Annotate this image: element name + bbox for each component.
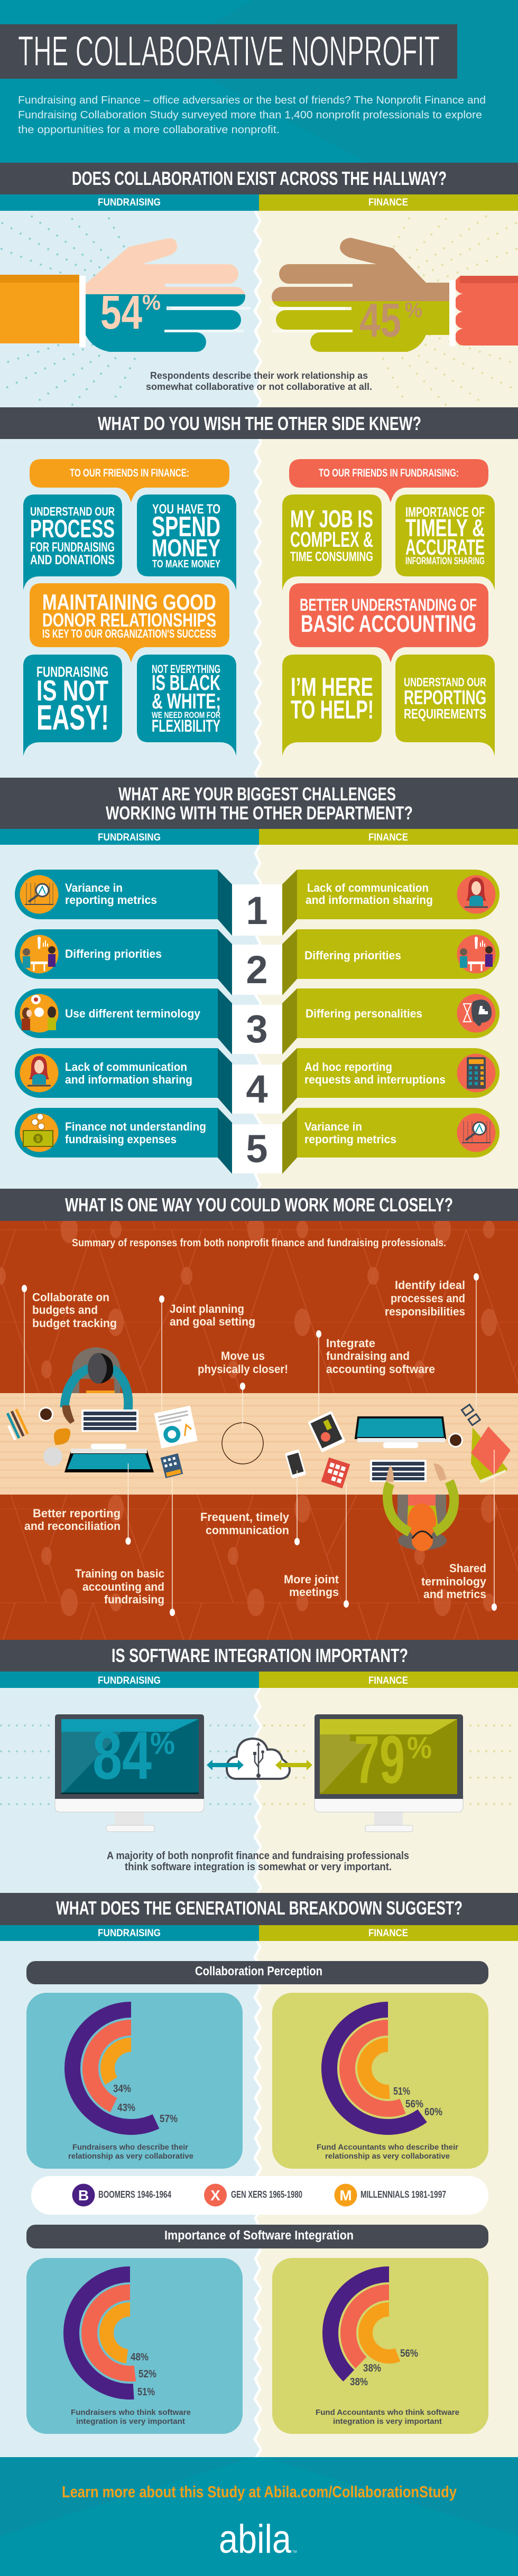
number column: 4 <box>246 1067 268 1111</box>
pill: importance of software integration: Importance of Software Integration <box>164 2228 354 2243</box>
bubble: reporting requirements: UNDERSTAND OUR <box>404 675 486 689</box>
icon: left monitor with 84 percent <box>55 1714 204 1832</box>
number column: 3 <box>246 1007 268 1051</box>
legend: GEN XERS 1965-1980 <box>231 2189 302 2200</box>
label: identify processes: Identify ideal <box>395 1278 465 1292</box>
bubble: donor relationships: DONOR RELATIONSHIPS <box>42 609 216 631</box>
chart: fundraisers collaboration: Fundraisers who describe their <box>72 2143 188 2152</box>
bubble: reporting requirements: REQUIREMENTS <box>404 706 486 722</box>
ribbon row 3: Differing personalities <box>306 1007 422 1020</box>
ribbon row 5: Finance not understanding <box>65 1120 206 1133</box>
number column <box>232 884 282 1173</box>
ribbon row 4: Lack of communication <box>65 1060 187 1074</box>
caption: respondents: somewhat collaborative or not collaborative at all. <box>146 381 372 392</box>
label: training: accounting and <box>82 1580 164 1593</box>
chart: accountants collaboration: 51% <box>393 2086 410 2097</box>
label: joint planning: Joint planning <box>170 1302 244 1315</box>
department strip 3 <box>0 1672 518 1688</box>
bubble: spend money <box>137 494 236 590</box>
heading: software integration: IS SOFTWARE INTEGRATION IMPORTANT? <box>112 1645 408 1666</box>
department strip 2 <box>0 829 518 845</box>
label: better reporting <box>24 1507 121 1533</box>
ribbon row 5: Variance in <box>304 1120 362 1133</box>
bubble: black and white: FLEXIBILITY <box>152 716 220 735</box>
panel: software integration <box>0 1688 518 1893</box>
bubble: fundraising is not easy: IS NOT <box>36 674 108 707</box>
ribbon row 2: Differing priorities <box>65 947 162 960</box>
bubble: donor relationships: MAINTAINING GOOD <box>42 590 216 614</box>
chart: accountants software: integration is very important <box>333 2417 442 2426</box>
icon: center plate <box>222 1423 263 1464</box>
stat: 54 percent: 54 <box>100 286 142 339</box>
bubble: my job is complex: TIME CONSUMING <box>290 549 373 564</box>
ribbon row 5: fundraising expenses <box>65 1133 177 1146</box>
icon: right monitor with 79 percent: 79 <box>354 1722 405 1798</box>
ribbon row 4: Ad hoc reporting <box>304 1060 392 1074</box>
label: collaborate on budgets: Collaborate on <box>32 1291 109 1304</box>
chart: accountants software: Fund Accountants who think software <box>316 2408 459 2417</box>
bubble: here to help: TO HELP! <box>291 696 374 724</box>
chart: accountants software: 38% <box>350 2376 368 2388</box>
pill: collaboration perception <box>26 1961 488 1984</box>
chart: accountants collaboration: relationship as very collaborative <box>325 2152 450 2161</box>
label: better reporting: and reconciliation <box>24 1519 121 1533</box>
chart: fundraisers software: 48% <box>131 2351 149 2363</box>
person: bottom right <box>386 1463 454 1551</box>
bubble: timely and accurate: IMPORTANCE OF <box>405 504 485 520</box>
chart: fundraisers software: integration is very important <box>76 2417 185 2426</box>
heading: what do you wish: WHAT DO YOU WISH THE OTHER SIDE KNEW? <box>98 413 421 434</box>
bubble: spend money: YOU HAVE TO <box>152 502 220 517</box>
ribbon row 4 <box>15 1048 500 1114</box>
legend: B <box>78 2187 89 2204</box>
heading: what do you wish <box>0 407 518 439</box>
stat: 54 percent: % <box>142 291 161 314</box>
panel: generational charts <box>0 1941 518 2457</box>
bubble: to friends in finance: TO OUR FRIENDS IN FINANCE: <box>70 467 189 479</box>
label: frequent communication: communication <box>206 1524 289 1537</box>
icon: right monitor with 79 percent <box>314 1714 463 1832</box>
department strip 2: FINANCE <box>368 832 408 843</box>
person: top left <box>62 1347 130 1429</box>
bubble: understand process: AND DONATIONS <box>30 553 115 567</box>
bubble: spend money: MONEY <box>152 534 220 562</box>
label: identify processes: responsibilities <box>385 1305 465 1318</box>
bubble: spend money: SPEND <box>152 511 220 543</box>
icon: usb cloud <box>227 1739 290 1779</box>
label: integrate software: Integrate <box>326 1337 375 1350</box>
heading: biggest challenges: WORKING WITH THE OTHER DEPARTMENT? <box>106 803 413 824</box>
label: more joint meetings: More joint <box>284 1573 339 1586</box>
ribbon row 1: Variance in <box>65 881 123 894</box>
label: shared terminology: and metrics <box>423 1588 486 1601</box>
intro text: Fundraising and Finance – office adversaries or the best of friends? The Nonprofit Finance and <box>18 95 486 106</box>
icon: left monitor with 84 percent: 84 <box>92 1718 152 1794</box>
caption: majority: A majority of both nonprofit finance and fundraising professionals <box>107 1850 409 1862</box>
chart: fundraisers software: 52% <box>138 2368 156 2380</box>
department strip 3: FINANCE <box>368 1675 408 1686</box>
chart: accountants collaboration: 56% <box>405 2098 423 2110</box>
stat: 45 percent: 45 <box>359 294 401 347</box>
label: better reporting: Better reporting <box>33 1507 121 1520</box>
number column: 5 <box>246 1127 268 1171</box>
label: more joint meetings: meetings <box>289 1585 339 1599</box>
subtitle: Summary of responses from both nonprofit finance and fundraising professionals. <box>72 1237 446 1249</box>
number column: 2 <box>246 948 268 992</box>
department strip 2: FUNDRAISING <box>98 832 161 843</box>
department strip 4: FUNDRAISING <box>98 1928 161 1939</box>
label: move us closer: Move us <box>221 1349 265 1362</box>
icon: desk items left <box>3 1406 198 1478</box>
department strip 3: FUNDRAISING <box>98 1675 161 1686</box>
bubble: donor relationships <box>30 583 229 662</box>
chart: fundraisers collaboration: 57% <box>160 2113 178 2125</box>
bubble: donor relationships: IS KEY TO OUR ORGANIZATION'S SUCCESS <box>42 627 216 640</box>
panel: footer <box>0 2457 518 2576</box>
bubble: reporting requirements <box>395 655 495 756</box>
bubble: to friends in fundraising <box>289 459 488 502</box>
ribbon row 1: Lack of communication <box>307 881 429 894</box>
bubble: black and white <box>137 655 236 756</box>
chart: fundraisers collaboration: relationship as very collaborative <box>68 2152 193 2161</box>
bubble: here to help: I’M HERE <box>291 673 373 702</box>
bubble: to friends in fundraising: TO OUR FRIENDS IN FUNDRAISING: <box>319 467 459 479</box>
legend: MILLENNIALS 1981-1997 <box>360 2189 446 2200</box>
caption: respondents: Respondents describe their work relationship as <box>150 370 368 381</box>
heading: software integration <box>0 1640 518 1672</box>
bubble: understand process: UNDERSTAND OUR <box>30 505 115 518</box>
label: move us closer <box>198 1349 288 1376</box>
heading: generational breakdown <box>0 1893 518 1925</box>
label: collaborate on budgets <box>32 1291 117 1330</box>
legend: X <box>210 2187 220 2204</box>
bubble: fundraising is not easy <box>23 655 122 756</box>
label: training: Training on basic <box>75 1567 164 1580</box>
label: move us closer: physically closer! <box>198 1362 288 1376</box>
department strip 1: FUNDRAISING <box>98 197 161 208</box>
pointer lines <box>22 1273 497 1616</box>
bubble: spend money: TO MAKE MONEY <box>152 558 220 570</box>
label: training: fundraising <box>104 1593 164 1606</box>
bubble: timely and accurate: TIMELY & <box>405 514 485 542</box>
label: identify processes: processes and <box>391 1292 465 1305</box>
icon: right monitor with 79 percent: % <box>407 1731 432 1765</box>
label: shared terminology: Shared <box>449 1562 486 1575</box>
bubble: my job is complex <box>282 494 382 590</box>
bubble: black and white: NOT EVERYTHING <box>152 662 220 676</box>
bubble: to friends in finance <box>30 459 229 502</box>
legend: BOOMERS 1946-1964 <box>98 2189 171 2200</box>
label: frequent communication <box>200 1510 290 1537</box>
chart: accountants collaboration: Fund Accountants who describe their <box>317 2143 458 2152</box>
chart: fundraisers software: 51% <box>137 2386 155 2398</box>
icon: right hand <box>270 238 518 352</box>
bubble: my job is complex: MY JOB IS <box>290 505 373 533</box>
bubble: fundraising is not easy: FUNDRAISING <box>36 664 108 680</box>
chart: fundraisers collaboration: 43% <box>117 2102 135 2114</box>
icon: left monitor with 84 percent: % <box>150 1726 175 1761</box>
label: integrate software: fundraising and <box>326 1349 410 1362</box>
label: joint planning: and goal setting <box>170 1315 255 1328</box>
label: frequent communication: Frequent, timely <box>200 1510 290 1524</box>
bubble: here to help <box>282 655 382 756</box>
intro text: Fundraising Collaboration Study surveyed more than 1,400 nonprofit professionals to explore <box>18 109 482 121</box>
chart: fundraisers collaboration <box>26 1993 243 2169</box>
panel: wish bubbles <box>0 439 518 778</box>
label: shared terminology: terminology <box>421 1575 487 1588</box>
bubble: understand process: FOR FUNDRAISING <box>30 540 115 555</box>
label: integrate software <box>326 1337 435 1376</box>
ribbon row 4: and information sharing <box>65 1073 192 1086</box>
panel: intro header <box>0 0 518 164</box>
label: identify processes <box>385 1278 465 1318</box>
label: joint planning <box>170 1302 255 1328</box>
desk surface <box>0 1393 518 1495</box>
ribbon row 5: reporting metrics <box>304 1133 396 1146</box>
legend: M <box>339 2187 352 2204</box>
chart: accountants collaboration <box>272 1993 488 2169</box>
ribbon row 1 <box>15 870 500 936</box>
intro text <box>18 95 486 136</box>
label: collaborate on budgets: budget tracking <box>32 1317 117 1330</box>
panel: desk scene <box>0 1221 518 1640</box>
bubble: basic accounting <box>289 583 488 662</box>
ribbon row 2: Differing priorities <box>304 949 401 962</box>
heading: work more closely <box>0 1189 518 1221</box>
label: training <box>75 1567 164 1606</box>
stat: 45 percent: % <box>405 298 422 322</box>
label: shared terminology <box>421 1562 487 1601</box>
label: more joint meetings <box>284 1573 339 1599</box>
logo: abila: abila <box>219 2517 292 2562</box>
department strip 1 <box>0 194 518 211</box>
bubble: understand process: PROCESS <box>30 515 115 543</box>
legend <box>31 2176 488 2215</box>
bubble: black and white: WE NEED ROOM FOR <box>152 710 220 720</box>
panel: challenges ranking <box>0 845 518 1189</box>
logo: abila: TM <box>292 2551 297 2554</box>
label: integrate software: accounting software <box>326 1362 435 1376</box>
chart: fundraisers software: Fundraisers who think software <box>71 2408 191 2417</box>
chart: fundraisers software <box>26 2258 243 2434</box>
caption: majority: think software integration is somewhat or very important. <box>125 1861 392 1873</box>
arrow: fundraising to cloud <box>207 1760 244 1770</box>
icon: left hand <box>0 238 251 352</box>
ribbon row 4: requests and interruptions <box>304 1073 446 1086</box>
department strip 4 <box>0 1925 518 1941</box>
arrow: finance to cloud <box>275 1760 312 1770</box>
bubble: black and white: IS BLACK <box>152 670 220 695</box>
heading: biggest challenges: WHAT ARE YOUR BIGGEST CHALLENGES <box>118 784 396 805</box>
pill: importance of software integration <box>26 2225 488 2248</box>
ribbon row 1: and information sharing <box>306 893 433 907</box>
bubble: fundraising is not easy: EASY! <box>36 698 109 738</box>
ribbon row 3 <box>15 988 500 1054</box>
caption: majority <box>107 1850 409 1873</box>
department strip 4: FINANCE <box>368 1928 408 1939</box>
ribbon row 2 <box>15 929 500 995</box>
chart: accountants software: 38% <box>363 2363 381 2374</box>
ribbon row 1: reporting metrics <box>65 893 157 907</box>
ribbon row 5 <box>15 1108 500 1174</box>
chart: accountants software <box>272 2258 488 2434</box>
intro text: the opportunities for a more collaborative nonprofit. <box>18 124 280 136</box>
chart: accountants software: 56% <box>400 2348 418 2359</box>
pill: collaboration perception: Collaboration Perception <box>195 1964 322 1978</box>
bubble: timely and accurate <box>395 494 495 590</box>
department strip 1: FINANCE <box>368 197 408 208</box>
chart: accountants collaboration: 60% <box>424 2106 442 2118</box>
bubble: black and white: & WHITE; <box>152 689 221 713</box>
chart: fundraisers collaboration: 34% <box>113 2083 131 2095</box>
icon: desk items right <box>285 1405 511 1488</box>
label: collaborate on budgets: budgets and <box>32 1303 98 1317</box>
heading: does collaboration exist <box>0 163 518 194</box>
heading: biggest challenges <box>0 778 518 829</box>
bubble: my job is complex: COMPLEX & <box>290 527 373 552</box>
caption: respondents <box>146 370 372 392</box>
ribbon row 3: Use different terminology <box>65 1007 201 1020</box>
bubble: understand process <box>23 494 122 590</box>
number column: 1 <box>246 889 268 932</box>
panel: handshake comparison <box>0 211 518 407</box>
